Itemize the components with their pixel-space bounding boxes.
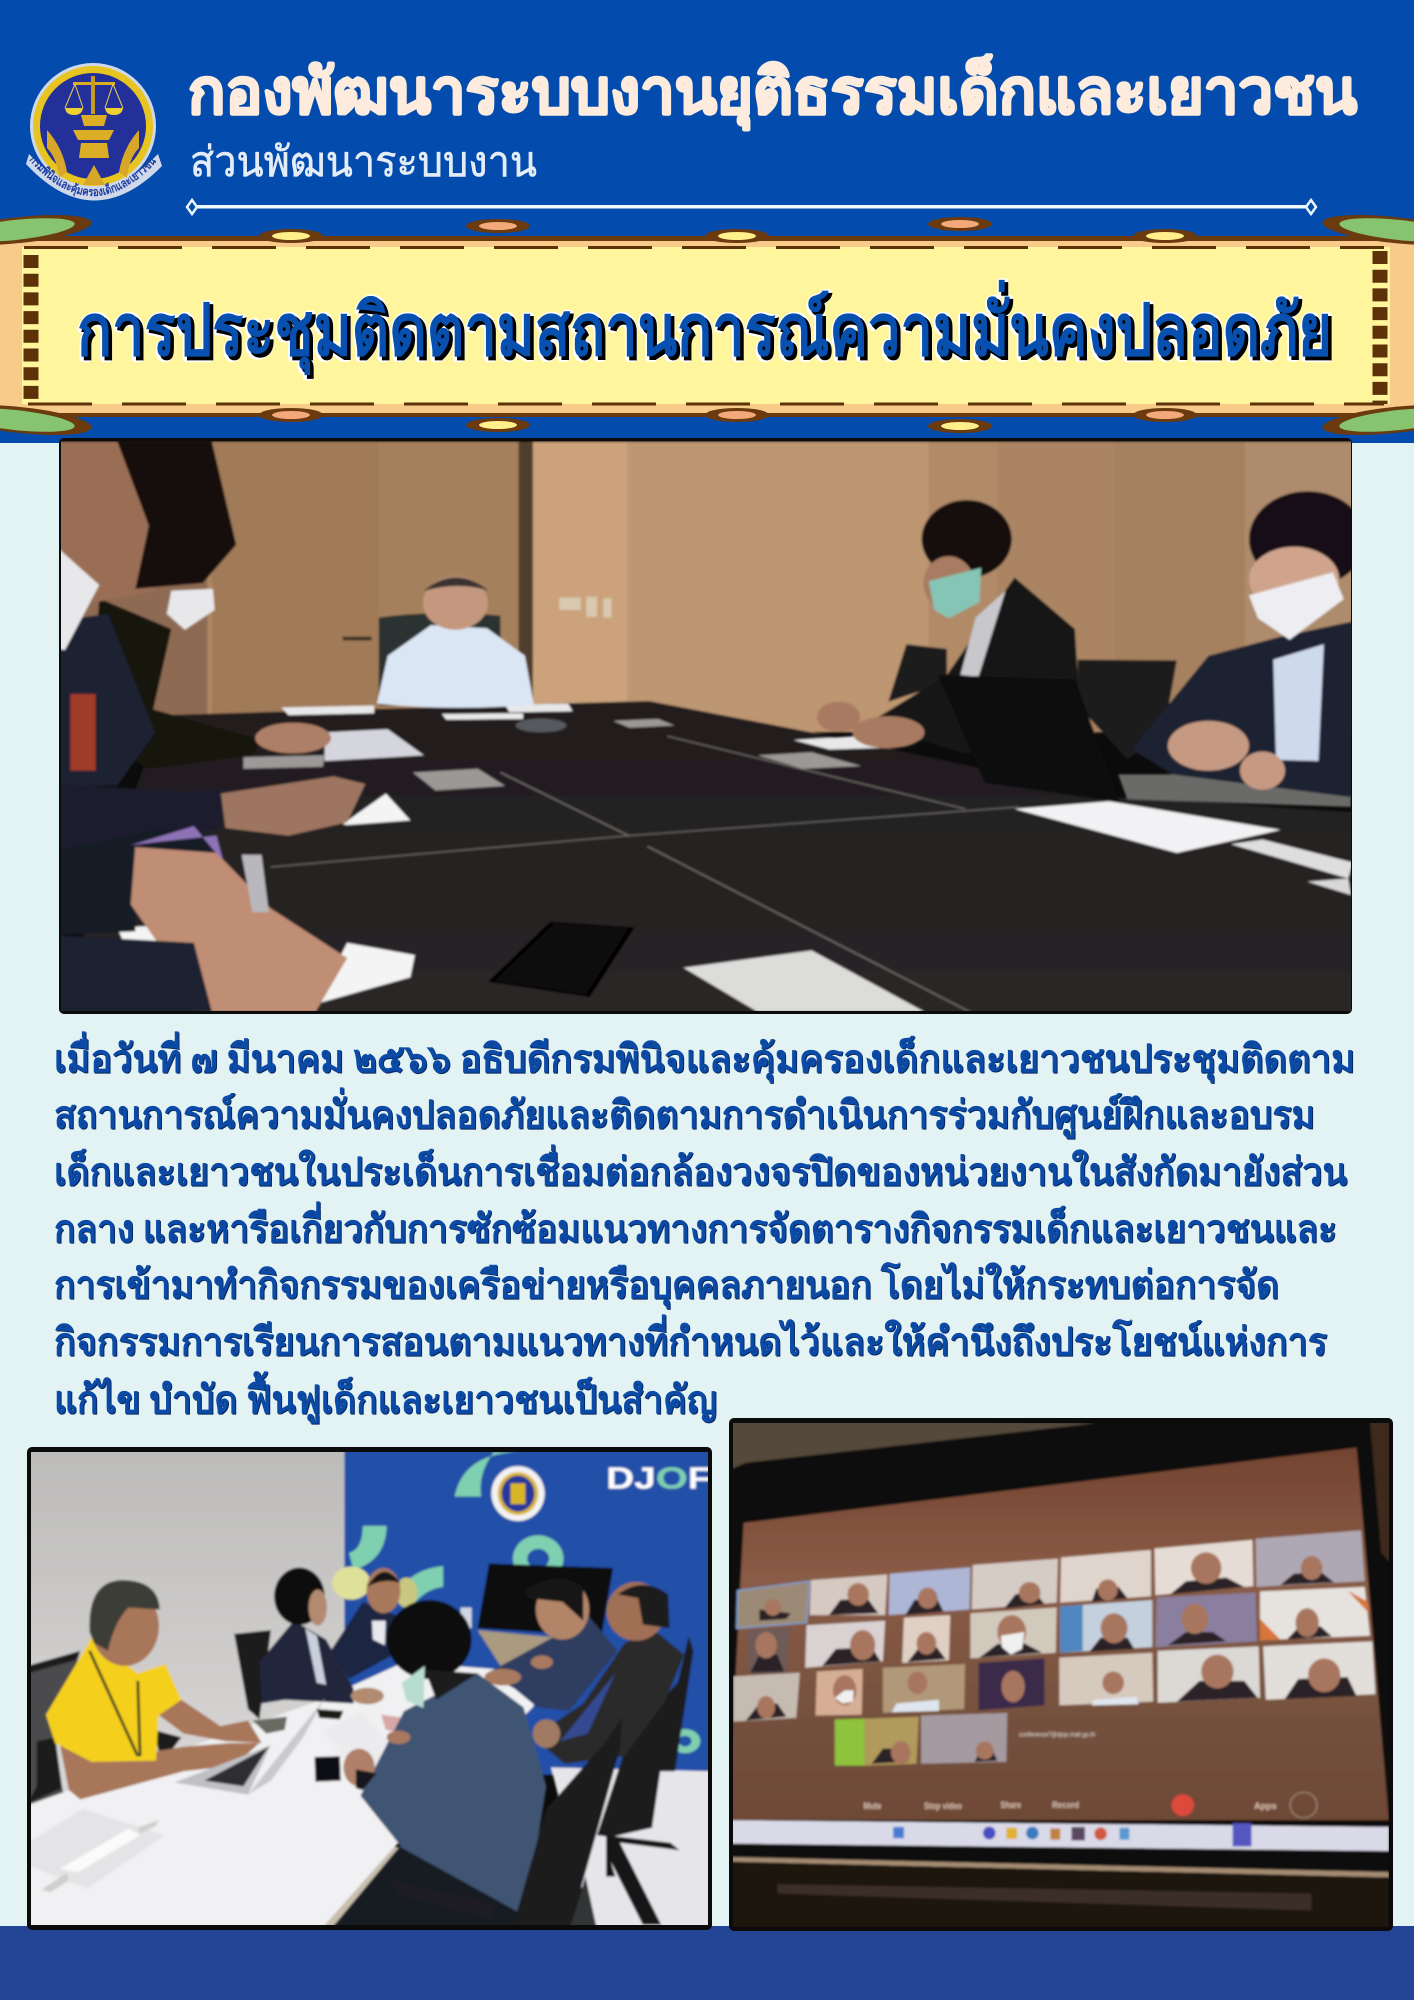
centre man — [379, 613, 500, 706]
lower dark area and front chair — [331, 1847, 519, 1929]
screen bottom rail and stand — [728, 1857, 1389, 1877]
banner stitching — [24, 248, 1384, 404]
zoom toolbar: Mute — [864, 1802, 882, 1812]
body paragraph: สถานการณ์ความมั่นคงปลอดภัยและติดตามการดำเนินการร่วมกับศูนย์ฝึกและอบรม — [54, 1087, 1315, 1139]
taskbar — [728, 1820, 1389, 1851]
right jacket man — [533, 1628, 684, 1764]
left people — [90, 598, 262, 769]
backdrop logo wordmark: F — [688, 1462, 711, 1495]
backdrop logo wordmark: DJ — [606, 1462, 656, 1495]
laptop — [938, 675, 1120, 802]
body paragraph — [54, 1031, 1355, 1424]
laptop — [174, 1745, 271, 1795]
zoom toolbar: Record — [1052, 1801, 1079, 1811]
left chair — [28, 1651, 80, 1805]
subheading: section name: ส่วนพัฒนาระบบงาน — [190, 138, 537, 185]
backdrop logo wordmark — [606, 1465, 708, 1491]
yellow shirt man — [60, 1743, 259, 1799]
conference labels: conference7@djop.mail.go.th — [1019, 1732, 1095, 1738]
projected screen — [728, 1448, 1389, 1820]
zoom toolbar: Apps — [1254, 1802, 1277, 1812]
centre back man — [321, 1711, 400, 1781]
table — [54, 701, 1362, 1016]
zoom toolbar: Share — [1001, 1801, 1022, 1811]
footer band — [0, 1926, 1414, 2000]
back woman chair and jacket — [234, 1630, 271, 1719]
participants — [746, 1572, 1357, 1764]
body paragraph: แก้ไข บำบัด ฟื้นฟูเด็กและเยาวชนเป็นสำคัญ — [54, 1371, 717, 1424]
small ovals — [259, 217, 1197, 433]
right navy man — [487, 1609, 618, 1711]
body paragraph: เมื่อวันที่ ๗ มีนาคม ๒๕๖๖ อธิบดีกรมพินิจและคุ้มครองเด็กและเยาวชนประชุมติดตาม — [54, 1031, 1355, 1083]
zoom toolbar — [864, 1801, 1277, 1812]
header divider line — [187, 200, 1316, 214]
heading: division name: กองพัฒนาระบบงานยุติธรรมเด็กและเยาวชน — [188, 54, 1357, 130]
zoom toolbar: Stop video — [924, 1802, 962, 1812]
photo: meeting room — [54, 441, 1366, 1016]
backdrop logo wordmark: O — [656, 1462, 688, 1495]
photo frame: office meeting — [27, 1447, 712, 1930]
photo frame: video conference — [729, 1418, 1393, 1931]
table — [28, 1662, 551, 1929]
speaker puck and phone — [516, 719, 566, 732]
body paragraph: กิจกรรมการเรียนการสอนตามแนวทางที่กำหนดไว้และให้คำนึงถึงประโยชน์แห่งการ — [54, 1314, 1327, 1364]
header band — [0, 0, 1414, 443]
title banner — [0, 210, 1414, 440]
right man — [888, 644, 1177, 759]
icon: department seal logo: กรมพินิจและคุ้มครองเด็กและเยาวชน — [29, 156, 156, 196]
icon: department seal logo — [26, 63, 162, 200]
corner ornaments — [0, 210, 1414, 440]
banner body — [0, 236, 1414, 417]
right woman — [1132, 621, 1353, 797]
photo: video conference on projector screen — [728, 1418, 1397, 1933]
video tiles — [733, 1530, 1375, 1766]
backdrop shapes — [455, 1452, 521, 1497]
photo frame: main meeting room — [59, 438, 1352, 1014]
right-side chair backs — [596, 1682, 680, 1838]
plates and papers — [413, 719, 861, 791]
items on table — [315, 1756, 341, 1782]
photo: office meeting with yellow shirt — [28, 1448, 712, 1929]
papers and mask on table — [28, 1809, 165, 1889]
monitor, cushion, flowers — [478, 1564, 613, 1636]
body paragraph: การเข้ามาทำกิจกรรมของเครือข่ายหรือบุคคลภายนอก โดยไม่ให้กระทบต่อการจัด — [54, 1262, 1279, 1309]
